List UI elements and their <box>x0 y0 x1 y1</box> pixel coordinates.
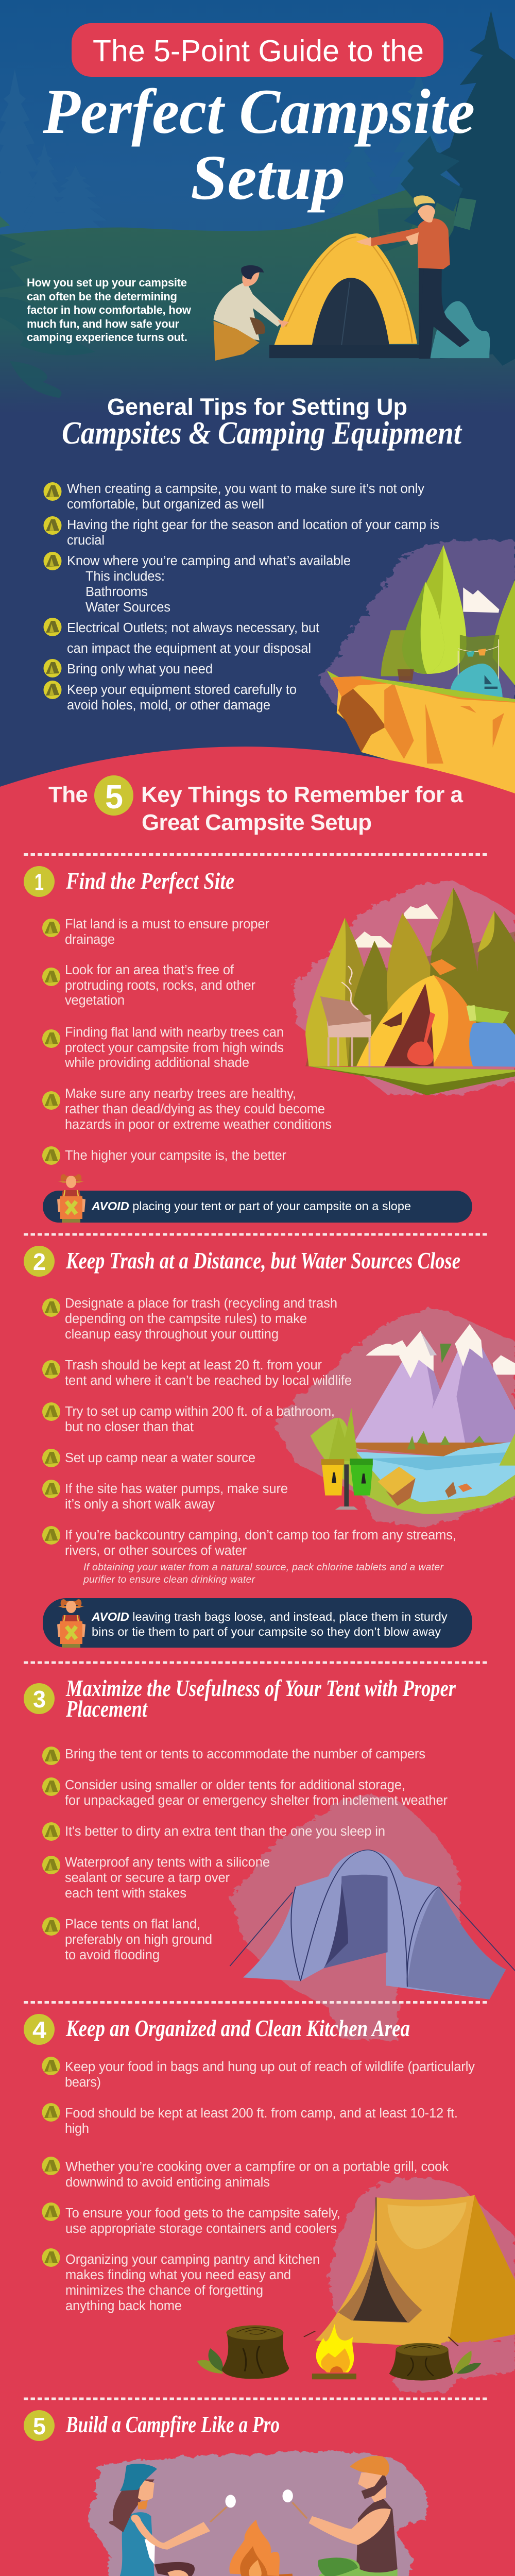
tip item: protect your campsite from high winds <box>65 1041 284 1055</box>
tip item: Trash should be kept at least 20 ft. from your <box>65 1358 322 1372</box>
tip item <box>42 1526 456 1585</box>
tip item: Designate a place for trash (recycling and trash <box>65 1296 337 1311</box>
title pill: The 5-Point Guide to the <box>93 34 424 68</box>
tip item <box>43 659 213 677</box>
callout: avoid trash bags: AVOID leaving trash bags loose, and instead, place them in sturdy <box>91 1610 448 1623</box>
intro text: How you set up your campsite <box>27 276 187 289</box>
tip item: crucial <box>67 533 105 548</box>
illustration: blue tent <box>230 1795 515 2040</box>
tip list <box>42 1747 448 1962</box>
tip item: If you’re backcountry camping, don’t camp too far from any streams, <box>65 1528 456 1543</box>
intro text: much fun, and how safe your <box>27 317 179 330</box>
tip item: comfortable, but organized as well <box>67 497 264 512</box>
tip item: Flat land is a must to ensure proper <box>65 917 270 931</box>
section heading: Find the Perfect Site <box>65 868 234 894</box>
tip item: use appropriate storage containers and coolers <box>65 2222 337 2236</box>
tip item: To ensure your food gets to the campsite safely, <box>65 2206 340 2221</box>
section heading: Build a Campfire Like a Pro <box>65 2411 280 2437</box>
intro text: factor in how comfortable, how <box>27 303 192 316</box>
number badge 4 <box>24 2014 55 2045</box>
panel: section 1 <box>24 866 515 1223</box>
tip item <box>42 963 255 1008</box>
title pill <box>72 23 443 77</box>
tip item <box>42 1480 288 1512</box>
heading: five key things: Key Things to Remember for a <box>141 782 464 807</box>
panel: hero <box>0 0 515 414</box>
tip item: anything back home <box>65 2299 182 2313</box>
tip item: If obtaining your water from a natural source, pack chlorine tablets and a water <box>83 1562 444 1573</box>
illustration: yellow tent and campfire <box>315 2178 515 2347</box>
tip item: can impact the equipment at your disposal <box>67 641 311 656</box>
icon: woman holding X sign <box>57 1599 85 1648</box>
tip item: Set up camp near a water source <box>65 1451 255 1465</box>
number badge 2: 2 <box>33 1248 46 1275</box>
tip item <box>42 1449 255 1467</box>
tip item: tent and where it can’t be reached by local wildlife <box>65 1374 352 1388</box>
section heading <box>65 1675 456 1722</box>
panel: section 4 <box>24 2014 515 2392</box>
callout: avoid slope: AVOID placing your tent or part of your campsite on a slope <box>91 1199 411 1213</box>
tip item: Look for an area that’s free of <box>65 963 234 977</box>
tip item <box>42 1917 212 1962</box>
illustration: stumps and fire <box>197 2323 515 2392</box>
panel: section 2 <box>24 1246 515 1648</box>
tip item <box>42 1402 335 1434</box>
tip item: to avoid flooding <box>65 1948 160 1962</box>
intro text: can often be the determining <box>27 290 177 303</box>
heading <box>62 394 462 451</box>
tip item: Water Sources <box>85 600 170 615</box>
tip item: Organizing your camping pantry and kitchen <box>65 2252 320 2267</box>
callout: avoid slope <box>43 1174 472 1223</box>
number badge 1 <box>24 866 55 897</box>
panel: section 5 <box>24 2410 458 2576</box>
tip item: Bathrooms <box>85 585 148 599</box>
tip item <box>42 1855 270 1901</box>
tip item: protruding roots, rocks, and other <box>65 978 255 993</box>
tip item: Try to set up camp within 200 ft. of a bathroom, <box>65 1404 335 1419</box>
tip item: for unpackaged gear or emergency shelter from inclement weather <box>65 1793 448 1808</box>
heading: Campsites & Camping Equipment <box>62 416 462 451</box>
hero forest scene <box>0 0 515 414</box>
tip item: Electrical Outlets; not always necessary, but <box>67 621 319 635</box>
title script: Perfect Campsite <box>42 76 475 147</box>
tip item: drainage <box>65 933 115 947</box>
tip item <box>42 1025 284 1070</box>
tip item <box>42 2103 458 2136</box>
tip item: minimizes the chance of forgetting <box>65 2283 263 2298</box>
illustration: campers pitching a tent <box>214 195 490 361</box>
illustration: campers roasting marshmallows <box>87 2451 428 2576</box>
section heading: Keep an Organized and Clean Kitchen Area <box>65 2015 410 2041</box>
tip item: Consider using smaller or older tents for additional storage, <box>65 1778 405 1792</box>
tip item: Keep your food in bags and hung up out of reach of wildlife (particularly <box>65 2060 475 2074</box>
panel: general tips <box>43 394 515 796</box>
section dividers <box>24 854 489 2399</box>
tip item: Waterproof any tents with a silicone <box>65 1855 270 1870</box>
tip item: Bring the tent or tents to accommodate the number of campers <box>65 1747 425 1761</box>
number badge 3: 3 <box>33 1686 46 1713</box>
tip list <box>42 917 332 1165</box>
callout: avoid trash bags: bins or tie them to part of your campsite so they don’t blow away <box>92 1625 441 1638</box>
tip item: Food should be kept at least 200 ft. from camp, and at least 10-12 ft. <box>65 2106 458 2121</box>
tip item <box>42 917 270 947</box>
tip item <box>43 552 351 615</box>
tip item <box>43 618 319 656</box>
tip item: it’s only a short walk away <box>65 1497 215 1512</box>
tip item: This includes: <box>85 569 165 584</box>
tip item: When creating a campsite, you want to make sure it’s not only <box>67 482 424 496</box>
heading: five key things: 5 <box>105 778 123 816</box>
tip item: Place tents on flat land, <box>65 1917 200 1931</box>
tip item: sealant or secure a tarp over <box>65 1871 230 1885</box>
illustration: tent with guitar and grill <box>293 881 515 1095</box>
tip item: hazards in poor or extreme weather conditions <box>65 1117 332 1132</box>
tip item: avoid holes, mold, or other damage <box>67 698 270 713</box>
section heading: Placement <box>65 1696 148 1722</box>
number badge 3 <box>24 1683 55 1714</box>
tip item: makes finding what you need easy and <box>65 2268 291 2282</box>
number badge 5 <box>24 2410 55 2441</box>
tip item <box>42 1087 332 1132</box>
intro text: camping experience turns out. <box>27 331 187 344</box>
tip item: Know where you’re camping and what’s available <box>67 554 351 568</box>
number badge 1: 1 <box>35 869 44 895</box>
title script <box>42 76 475 213</box>
tip item: Having the right gear for the season and location of your camp is <box>67 518 439 532</box>
panel: five key things background <box>0 747 515 2576</box>
tip item <box>43 516 439 548</box>
illustration: cliff campsite <box>319 540 515 796</box>
tip item: Finding flat land with nearby trees can <box>65 1025 284 1040</box>
tip item: downwind to avoid enticing animals <box>65 2175 270 2190</box>
tip item: Make sure any nearby trees are healthy, <box>65 1087 296 1101</box>
tip item: It's better to dirty an extra tent than the one you sleep in <box>65 1824 385 1839</box>
heading: five key things: The <box>48 782 88 807</box>
tip item: high <box>65 2122 89 2136</box>
tip item: bears) <box>65 2075 101 2090</box>
illustration: mountains, lake and bins <box>276 1309 515 1528</box>
tip item: Bring only what you need <box>67 662 213 676</box>
tip item: rather than dead/dying as they could become <box>65 1102 325 1116</box>
tip item <box>42 2157 449 2190</box>
callout: avoid trash bags <box>43 1598 472 1648</box>
tip list <box>43 482 439 713</box>
tip item <box>43 681 297 713</box>
intro text <box>27 276 192 344</box>
tip item <box>42 1358 352 1388</box>
tip item: cleanup easy throughout your outting <box>65 1327 279 1342</box>
tip item <box>42 1777 448 1808</box>
icon: woman holding X sign <box>57 1174 85 1223</box>
tip item: depending on the campsite rules) to make <box>65 1312 307 1326</box>
heading: five key things: Great Campsite Setup <box>142 810 372 835</box>
panel: section 3 <box>24 1675 515 2040</box>
tip item <box>42 2248 320 2313</box>
tip item <box>42 2202 340 2236</box>
tip item: preferably on high ground <box>65 1933 212 1947</box>
title script: Setup <box>191 142 345 213</box>
tip item: rivers, or other sources of water <box>65 1544 247 1558</box>
tip item <box>42 2057 475 2090</box>
number badge 5: 5 <box>33 2413 46 2439</box>
tip list <box>42 2057 475 2313</box>
tip item: The higher your campsite is, the better <box>65 1148 286 1163</box>
tip item: vegetation <box>65 993 125 1008</box>
number badge 4: 4 <box>32 2016 46 2043</box>
tip item <box>42 1296 337 1342</box>
tip item: If the site has water pumps, make sure <box>65 1482 288 1496</box>
heading: General Tips for Setting Up <box>107 394 407 420</box>
tip item: each tent with stakes <box>65 1886 186 1901</box>
heading: five key things <box>48 775 464 835</box>
tip item: Whether you’re cooking over a campfire or on a portable grill, cook <box>65 2160 449 2174</box>
tip item: while providing additional shade <box>64 1056 249 1070</box>
tip list <box>42 1296 456 1585</box>
number badge 2 <box>24 1246 55 1277</box>
tip item <box>43 482 424 512</box>
tip item: Keep your equipment stored carefully to <box>67 683 297 697</box>
tip item: but no closer than that <box>65 1420 194 1434</box>
tip item: purifier to ensure clean drinking water <box>83 1574 255 1585</box>
